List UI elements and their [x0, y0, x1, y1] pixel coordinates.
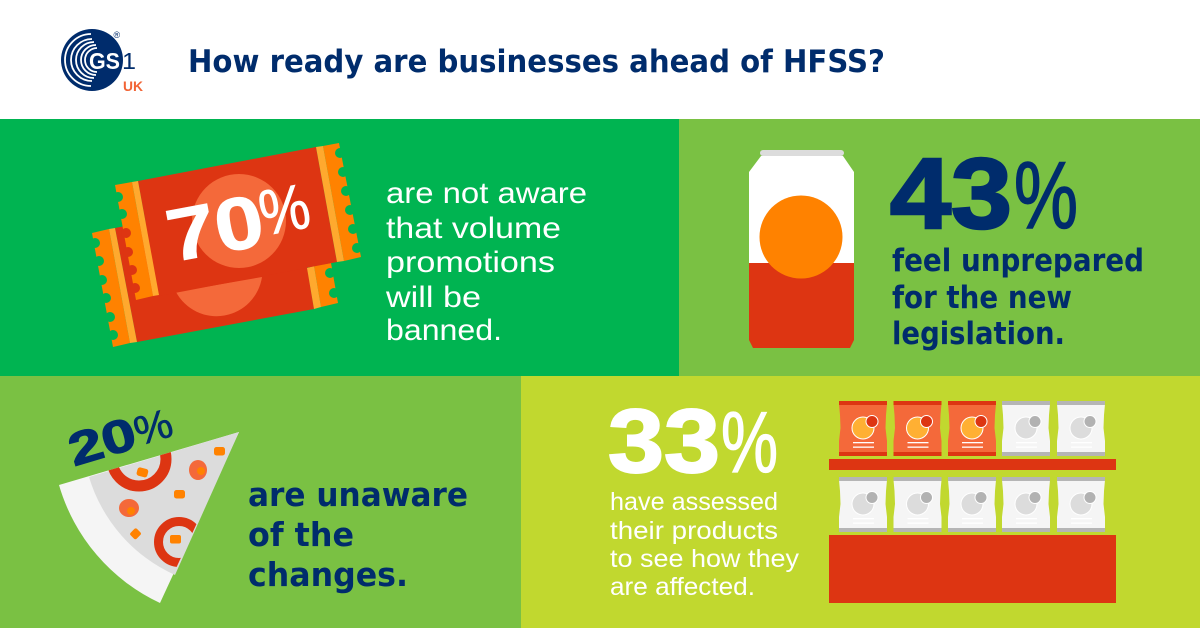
text: are not aware	[385, 177, 587, 347]
logo: GS1 UK	[61, 29, 143, 94]
text: are not aware: banned.	[386, 314, 502, 347]
text: have assessed	[610, 488, 800, 601]
stat: 33%: %	[721, 395, 778, 491]
logo: GS1 UK: 1	[122, 48, 136, 74]
text: have assessed: are affected.	[610, 573, 755, 601]
text: have assessed: their products	[610, 517, 778, 545]
stat: 20%: %	[128, 400, 178, 455]
panel: 70% not aware	[0, 119, 679, 376]
stat: 33%	[608, 392, 778, 492]
stat: 43%	[890, 138, 1078, 250]
text: feel unprepared: for the new	[892, 280, 1072, 316]
stat: 20%: 20	[62, 407, 142, 476]
stat: 70%: %	[253, 170, 316, 250]
text: are unaware: changes.	[248, 555, 408, 594]
logo: GS1 UK: GS	[89, 48, 120, 74]
text: are not aware: that volume	[386, 212, 561, 245]
stat: 70%	[160, 170, 318, 278]
stat: 33%: 33	[608, 392, 720, 492]
chart: shelf of snack bags	[829, 401, 1116, 603]
text: are unaware: of the	[248, 515, 354, 554]
icon: drinks can	[749, 150, 854, 348]
icon: coupon tickets	[90, 143, 362, 347]
text: feel unprepared: legislation.	[892, 316, 1065, 352]
text: feel unprepared: feel unprepared	[892, 243, 1144, 279]
text: are not aware: are not aware	[386, 177, 587, 210]
text: have assessed: have assessed	[610, 488, 778, 516]
text: are not aware: promotions	[386, 246, 555, 279]
text: are unaware	[248, 475, 468, 594]
stat: 43%: %	[1014, 143, 1078, 249]
panel: 20% unaware	[0, 376, 521, 628]
title: How ready are businesses ahead of HFSS?	[188, 44, 885, 80]
text: are not aware: will be	[385, 281, 481, 314]
text: have assessed: to see how they	[610, 545, 800, 573]
logo: GS1 UK: UK	[123, 78, 143, 94]
text: are unaware: are unaware	[248, 475, 468, 514]
stat: 70%: 70	[160, 178, 270, 278]
text: feel unprepared	[892, 243, 1144, 352]
stat: 43%: 43	[890, 138, 1012, 250]
panel: 43% unprepared	[679, 119, 1200, 376]
icon: pizza slice	[59, 432, 239, 603]
stat: 20%	[62, 396, 179, 476]
panel: 33% assessed	[521, 376, 1200, 628]
logo: GS1 UK: ®	[114, 30, 120, 40]
